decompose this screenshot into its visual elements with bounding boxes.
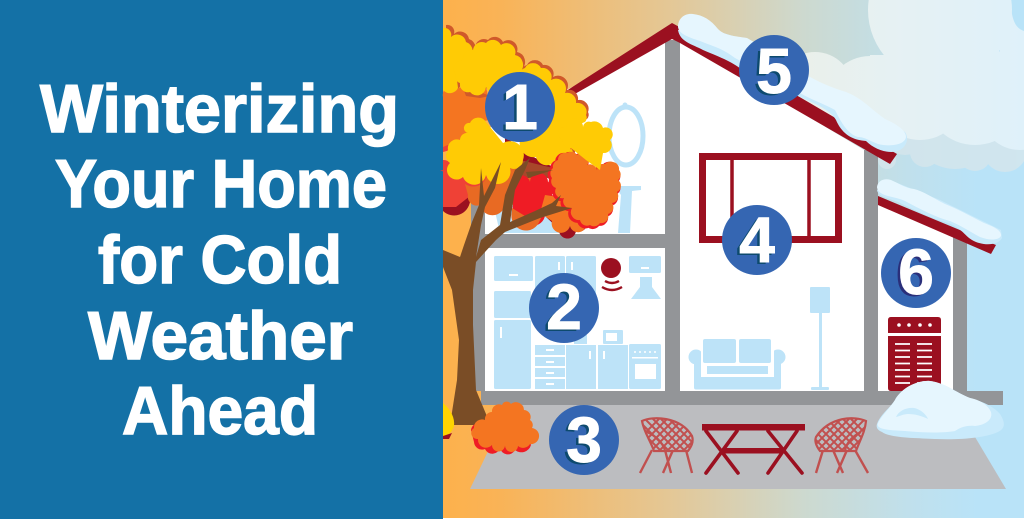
fridge <box>494 291 531 389</box>
lower cabinets and stove <box>535 344 661 389</box>
trunk and branches <box>443 158 572 425</box>
microwave <box>574 330 623 344</box>
icon: range hood <box>631 277 661 299</box>
left orange cluster <box>443 80 490 147</box>
background: left title panel <box>0 0 443 519</box>
number badge 6: 6 <box>895 238 931 310</box>
icon: floor lamp <box>810 287 830 390</box>
house: grey walls and floors <box>471 40 1003 405</box>
number badge 3: 3 <box>563 406 599 478</box>
big orange cluster <box>549 152 621 228</box>
living room furniture <box>688 287 830 390</box>
title <box>40 71 399 449</box>
icon: right chair <box>814 417 869 474</box>
title: Weather <box>88 298 353 374</box>
small roof snow <box>877 179 1002 244</box>
cloud <box>777 0 1024 172</box>
upper cabinets <box>494 256 661 296</box>
number badge 4: 4 <box>739 204 775 276</box>
number badge 1: 1 <box>499 73 535 145</box>
tree <box>440 25 621 425</box>
window <box>702 156 838 240</box>
house: white rooms <box>485 38 953 391</box>
number badge 4: 4 <box>736 206 772 278</box>
house: bathroom fixtures <box>493 102 643 233</box>
small yellow right cluster <box>558 118 613 170</box>
number badge 5: 5 <box>756 35 792 107</box>
icon: table <box>702 424 805 473</box>
number badge 2: 2 <box>543 273 579 345</box>
icon: smoke alarm <box>601 258 622 290</box>
title: for Cold <box>98 222 342 298</box>
lower foliage <box>443 130 587 239</box>
yellow clusters with dark edge <box>443 25 589 165</box>
number badge 1: 1 <box>502 71 538 143</box>
title: Your Home <box>55 146 387 222</box>
icon: mirror <box>609 102 643 165</box>
main roof <box>563 23 897 164</box>
kitchen <box>494 256 661 389</box>
number badge 1 <box>485 71 555 145</box>
yellow lower-left cluster <box>440 118 524 187</box>
icon: orange bush <box>471 402 539 454</box>
number badge 6: 6 <box>898 236 934 308</box>
number badge 2 <box>529 271 599 345</box>
icon: left chair <box>639 417 694 474</box>
icon: snow pile <box>877 381 1004 439</box>
icon: vanity <box>493 203 566 233</box>
number badge 5: 5 <box>753 37 789 109</box>
title: Winterizing <box>40 71 399 147</box>
number badge 4 <box>722 204 792 278</box>
icon: yellow shrub <box>443 403 454 439</box>
number badge 5 <box>739 35 809 109</box>
patio <box>470 395 1006 489</box>
icon: sofa <box>688 339 786 390</box>
number badge 3 <box>549 404 619 478</box>
main roof snow <box>678 14 907 152</box>
title: Ahead <box>122 373 318 449</box>
icon: sink <box>618 186 641 233</box>
number badge 2: 2 <box>546 271 582 343</box>
panel: seasonal sky background <box>443 0 1024 518</box>
orange background wedge around trunk <box>443 200 471 257</box>
number badge 6 <box>881 236 951 310</box>
icon: space heater <box>888 317 941 391</box>
small roof <box>878 196 996 254</box>
number badge 3: 3 <box>566 404 602 476</box>
